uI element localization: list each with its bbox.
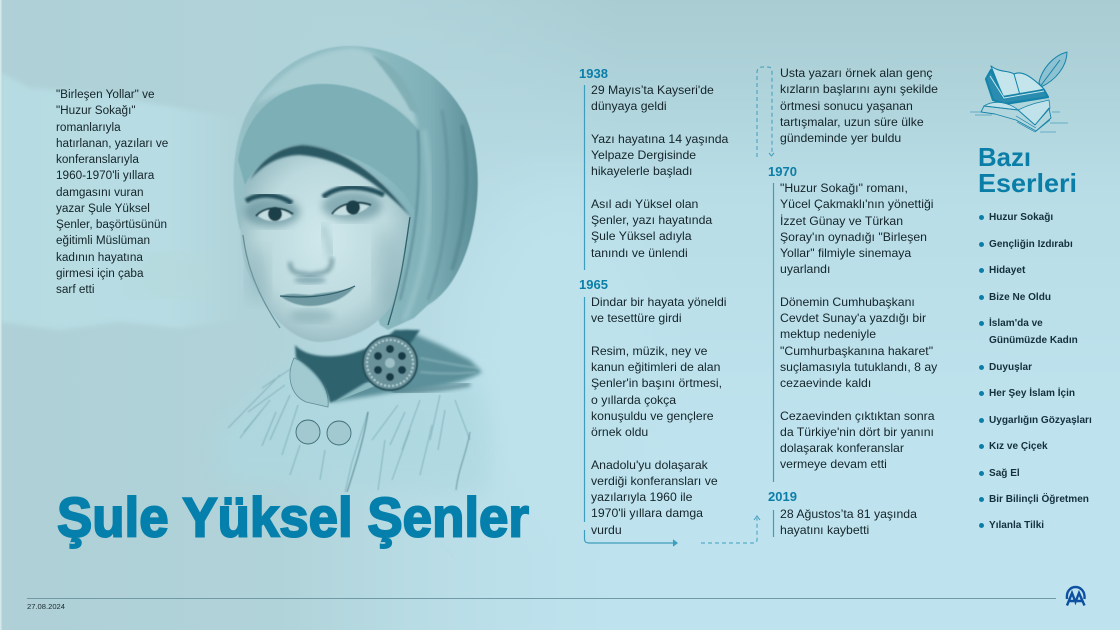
timeline 1965 text: örnek oldu: [591, 425, 648, 439]
face shading: [246, 247, 270, 303]
neck shadow: [295, 330, 420, 403]
list of works: Günümüzde Kadın: [989, 334, 1078, 346]
timeline 1938 text: tanındı ve ünlendi: [591, 246, 688, 260]
list of works: İslam'da ve: [989, 318, 1043, 329]
timeline 1970 text: Dönemin Cumhubaşkanı: [780, 295, 915, 309]
timeline continued text: [780, 66, 938, 145]
timeline 1938 text: Yazı hayatına 14 yaşında: [591, 132, 728, 146]
timeline 1965 text: vurdu: [591, 522, 622, 536]
lower book: [984, 100, 1050, 125]
eyebrows: [246, 195, 292, 203]
timeline 1970 text: vermeye devam etti: [780, 457, 887, 471]
timeline 2019 text: 28 Ağustos’ta 81 yaşında: [780, 507, 917, 521]
timeline 1965 text: konuşuldu ve gençlere: [591, 409, 714, 423]
timeline 1965 text: 1970'li yıllara damga: [591, 506, 703, 520]
timeline 1965 text: yazılarıyla 1960 ile: [591, 490, 692, 504]
timeline 1965 text: ve tesettüre girdi: [591, 311, 682, 325]
intro text: konferanslarıyla: [56, 153, 139, 166]
intro text: [56, 88, 168, 296]
timeline continued text: Usta yazarı örnek alan genç: [780, 66, 933, 80]
timeline 1970 text: İzzet Günay ve Türkan: [780, 214, 903, 228]
timeline 1965: 1965: [579, 277, 608, 292]
intro text: "Huzur Sokağı": [56, 104, 136, 117]
list of works: Sağ El: [989, 468, 1020, 479]
timeline 1970 text: da Türkiye'nin dört bir yanını: [780, 425, 934, 439]
list of works: Gençliğin Izdırabı: [989, 239, 1073, 250]
timeline 1938 text: hikayelerle başladı: [591, 164, 692, 178]
intro text: hatırlanan, yazıları ve: [56, 137, 168, 150]
timeline 1965 text: [591, 295, 727, 536]
timeline 1965 text: Şenler'in başını örtmesi,: [591, 376, 722, 390]
list of works: Uygarlığın Gözyaşları: [989, 415, 1092, 426]
timeline continued text: kızların başlarını aynı şekilde: [780, 82, 938, 96]
timeline 1938 text: Şenler, yazı hayatında: [591, 213, 712, 227]
collar: [290, 358, 328, 407]
hijab inner panel: [238, 84, 418, 215]
fabric buttons: [296, 420, 351, 445]
eye: right: [332, 200, 371, 215]
face: [241, 145, 410, 342]
timeline 1970 text: [780, 181, 938, 471]
timeline 1965 text: Anadolu'yu dolaşarak: [591, 458, 708, 472]
intro text: kadının hayatına: [56, 250, 143, 264]
list of works: Yılanla Tilki: [989, 520, 1044, 531]
timeline 1938 text: dünyaya geldi: [591, 99, 667, 113]
timeline 1970 text: dolaşarak konferanslar: [780, 441, 904, 455]
heading: Bazı Eserleri: Eserleri: [978, 168, 1077, 198]
intro text: Şenler, başörtüsünün: [56, 218, 167, 231]
intro text: damgasını vuran: [56, 186, 144, 198]
list of works: Her Şey İslam İçin: [989, 388, 1075, 399]
timeline 1970: 1970: [768, 164, 797, 179]
list of works: Hidayet: [989, 265, 1025, 276]
list of works: Kız ve Çiçek: [989, 441, 1048, 452]
hijab light top band: [256, 48, 418, 130]
list of works: Bir Bilinçli Öğretmen: [989, 494, 1089, 505]
date: 27.08.2024: [27, 602, 65, 611]
list of works: [979, 212, 1092, 531]
list of works: Duyuşlar: [989, 362, 1032, 373]
mouth: [280, 286, 355, 306]
timeline 1938 text: Yelpaze Dergisinde: [591, 148, 696, 162]
timeline 1965 text: kanun eğitimleri de alan: [591, 360, 720, 374]
nose: [290, 258, 332, 275]
quill: [1039, 52, 1067, 87]
timeline continued text: örtmesi sonucu yaşanan: [780, 98, 913, 112]
intro text: eğitimli Müslüman: [56, 234, 150, 247]
brooch: [363, 336, 417, 390]
timeline 1970 text: mektup nedeniyle: [780, 327, 876, 341]
list of works: Bize Ne Oldu: [989, 292, 1051, 303]
footer rule: [27, 598, 1056, 599]
hijab folds: [400, 110, 467, 300]
heading: Bazı Eserleri: Bazı: [978, 142, 1031, 172]
intro text: romanlarıyla: [56, 120, 121, 134]
title: Şule Yüksel Şenler: [57, 486, 529, 548]
timeline 1970 text: Cevdet Sunay'a yazdığı bir: [780, 311, 926, 325]
timeline 1938 text: Asıl adı Yüksel olan: [591, 197, 698, 211]
timeline 1965 text: verdiği konferansları ve: [591, 474, 718, 488]
timeline 1970 text: "Huzur Sokağı" romanı,: [780, 181, 908, 195]
timeline 1965 text: Dindar bir hayata yöneldi: [591, 295, 727, 309]
timeline 1970 text: Cezaevinden çıktıktan sonra: [780, 408, 935, 422]
intro text: 1960-1970'li yıllara: [56, 169, 154, 182]
timeline 2019: 2019: [768, 489, 797, 504]
timeline 1970 text: "Cumhurbaşkanına hakaret": [780, 344, 933, 358]
timeline 1970 text: Yollar" filmiyle sinemaya: [780, 246, 911, 260]
intro text: sarf etti: [56, 283, 95, 296]
timeline 1938 text: Şule Yüksel adıyla: [591, 229, 692, 243]
timeline 1970 text: cezaevinde kaldı: [780, 376, 871, 390]
timeline 1938: 1938: [579, 66, 608, 81]
intro text: "Birleşen Yollar" ve: [56, 88, 154, 101]
timeline 1938 text: 29 Mayıs’ta Kayseri'de: [591, 83, 714, 97]
hijab: [234, 46, 478, 330]
timeline 2019 text: [780, 507, 917, 537]
scarf tail: [332, 330, 482, 402]
timeline continued text: tartışmalar, uzun süre ülke: [780, 115, 924, 129]
timeline continued text: gündeminde yer buldu: [780, 131, 901, 145]
timeline 1970 text: Şoray'ın oynadığı "Birleşen: [780, 230, 927, 244]
timeline 1970 text: uyarlandı: [780, 262, 830, 276]
eye sockets: [244, 197, 300, 227]
intro text: girmesi için çaba: [56, 267, 144, 280]
timeline 1970 text: suçlamasıyla tutuklandı, 8 ay: [780, 360, 937, 374]
upper book: [991, 66, 1044, 97]
intro text: yazar Şule Yüksel: [56, 202, 150, 215]
timeline 1970 text: Yücel Çakmaklı'nın yönettiği: [780, 197, 934, 211]
timeline 1938 text: [591, 83, 728, 260]
garment fibres: [228, 368, 470, 492]
timeline 1965 text: Resim, müzik, ney ve: [591, 344, 707, 358]
timeline 2019 text: hayatını kaybetti: [780, 523, 869, 537]
hairline shadow: [250, 145, 410, 216]
garment: [215, 362, 490, 495]
eye: left: [256, 207, 293, 221]
timeline 1965 text: o yıllarda çokça: [591, 392, 676, 406]
list of works: Huzur Sokağı: [989, 212, 1053, 223]
